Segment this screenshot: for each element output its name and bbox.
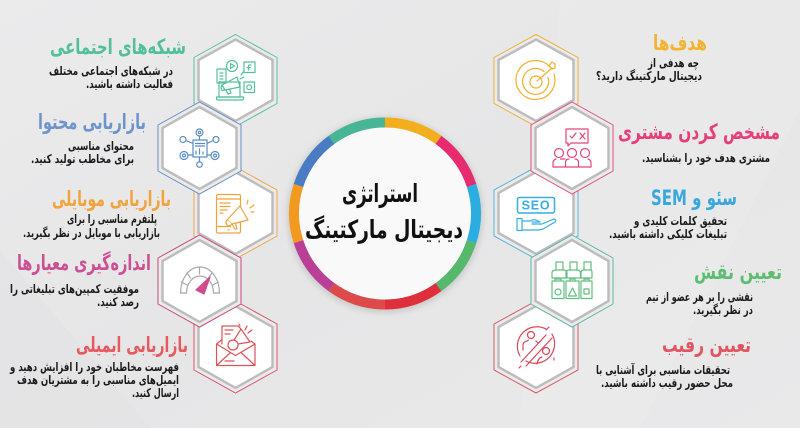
text: social networks description: در شبکه‌های اجتماعی مختلف: [49, 64, 173, 78]
title: content marketing: بازاریابی محتوا: [38, 110, 146, 134]
heading: central title: [305, 179, 463, 244]
panel: social networks: [49, 34, 277, 126]
text: content marketing description: [31, 139, 134, 167]
text: assign roles description: نقشی را بر هر عضو از تیم: [646, 290, 753, 305]
text: goals description: [596, 56, 702, 83]
title: SEO and SEM: سئو و SEM: [651, 186, 737, 210]
panel: goals: [494, 31, 707, 126]
title: competitor: تعیین رقیب: [662, 333, 751, 357]
heading: central title: دیجیتال مارکتینگ: [305, 215, 463, 244]
panel: email marketing: [9, 301, 277, 400]
icon: mobile megaphone: [216, 194, 254, 233]
text: assign roles description: در نظر بگیرید.: [693, 303, 753, 317]
text: mobile marketing description: بازاریابی با موبایل در نظر بگیرید.: [23, 226, 160, 241]
text: competitor description: محل حضور رقیب داشته باشید.: [601, 376, 733, 391]
heading: central title: استراتژی: [342, 179, 418, 209]
panel: mobile marketing: [23, 167, 277, 259]
text: email marketing description: ایمیل‌های مناسبی را به مشتریان هدف: [17, 373, 179, 387]
title: measuring metrics: اندازه‌گیری معیارها: [17, 250, 151, 275]
text: mobile marketing description: [23, 212, 160, 241]
icon: target: [516, 61, 555, 100]
text: content marketing description: برای مخاطب تولید کنید.: [31, 152, 134, 167]
panel: measuring metrics: [10, 235, 241, 327]
text: mobile marketing description: پلتفرم مناسبی را برای: [67, 212, 157, 227]
icon: content network: [180, 129, 219, 167]
panel: SEO and SEM: [494, 167, 737, 259]
icon: customers feedback: [553, 129, 591, 167]
icon: speedometer: [180, 267, 220, 294]
panel: identify customer: [531, 102, 780, 194]
text: measuring metrics description: رصد کنید.: [97, 295, 139, 309]
title: email marketing: بازاریابی ایمیلی: [76, 333, 188, 357]
panel: central circle: [287, 117, 483, 313]
text: competitor description: تحقیقات مناسبی برای آشنایی با: [596, 362, 730, 377]
text: social networks description: فعالیت داشته باشید.: [86, 77, 173, 91]
panel: competitor: [494, 301, 751, 393]
title: goals: هدف‌ها: [653, 31, 707, 55]
chart: coloured ring: [294, 122, 476, 304]
icon: email megaphone: [216, 324, 255, 366]
text: competitor description: [596, 362, 733, 391]
text: content marketing description: محتوای مناسبی: [68, 139, 134, 154]
text: assign roles description: [646, 290, 753, 317]
icon: team roles: [552, 262, 592, 298]
panel: assign roles: [531, 235, 782, 327]
icon: no competitor: [517, 327, 555, 368]
title: social networks: شبکه‌های اجتماعی: [50, 35, 186, 59]
text: SEO and SEM description: [609, 214, 727, 241]
text: email marketing description: فهرست مخاطبان خود را افزایش دهید و: [9, 360, 179, 375]
icon: SEO hand: [517, 198, 556, 230]
text: email marketing description: [9, 360, 179, 400]
text: goals description: چه هدفی از: [647, 56, 699, 70]
text: measuring metrics description: موفقیت کمپین‌های تبلیغاتی را: [10, 282, 139, 297]
text: measuring metrics description: [10, 282, 139, 309]
icon: SEO hand: SEO: [522, 198, 550, 212]
text: goals description: دیجیتال مارکتینگ دارید؟: [596, 69, 702, 83]
text: social networks description: [49, 64, 173, 91]
text: email marketing description: ارسال کنید.: [132, 386, 179, 400]
text: SEO and SEM description: تبلیغات کلیکی داشته باشید.: [609, 227, 727, 241]
icon: social media megaphone: [216, 60, 255, 100]
title: mobile marketing: بازاریابی موبایلی: [52, 187, 171, 211]
panel: content marketing: [31, 102, 241, 194]
text: SEO and SEM description: تحقیق کلمات کلیدی و: [633, 214, 727, 229]
